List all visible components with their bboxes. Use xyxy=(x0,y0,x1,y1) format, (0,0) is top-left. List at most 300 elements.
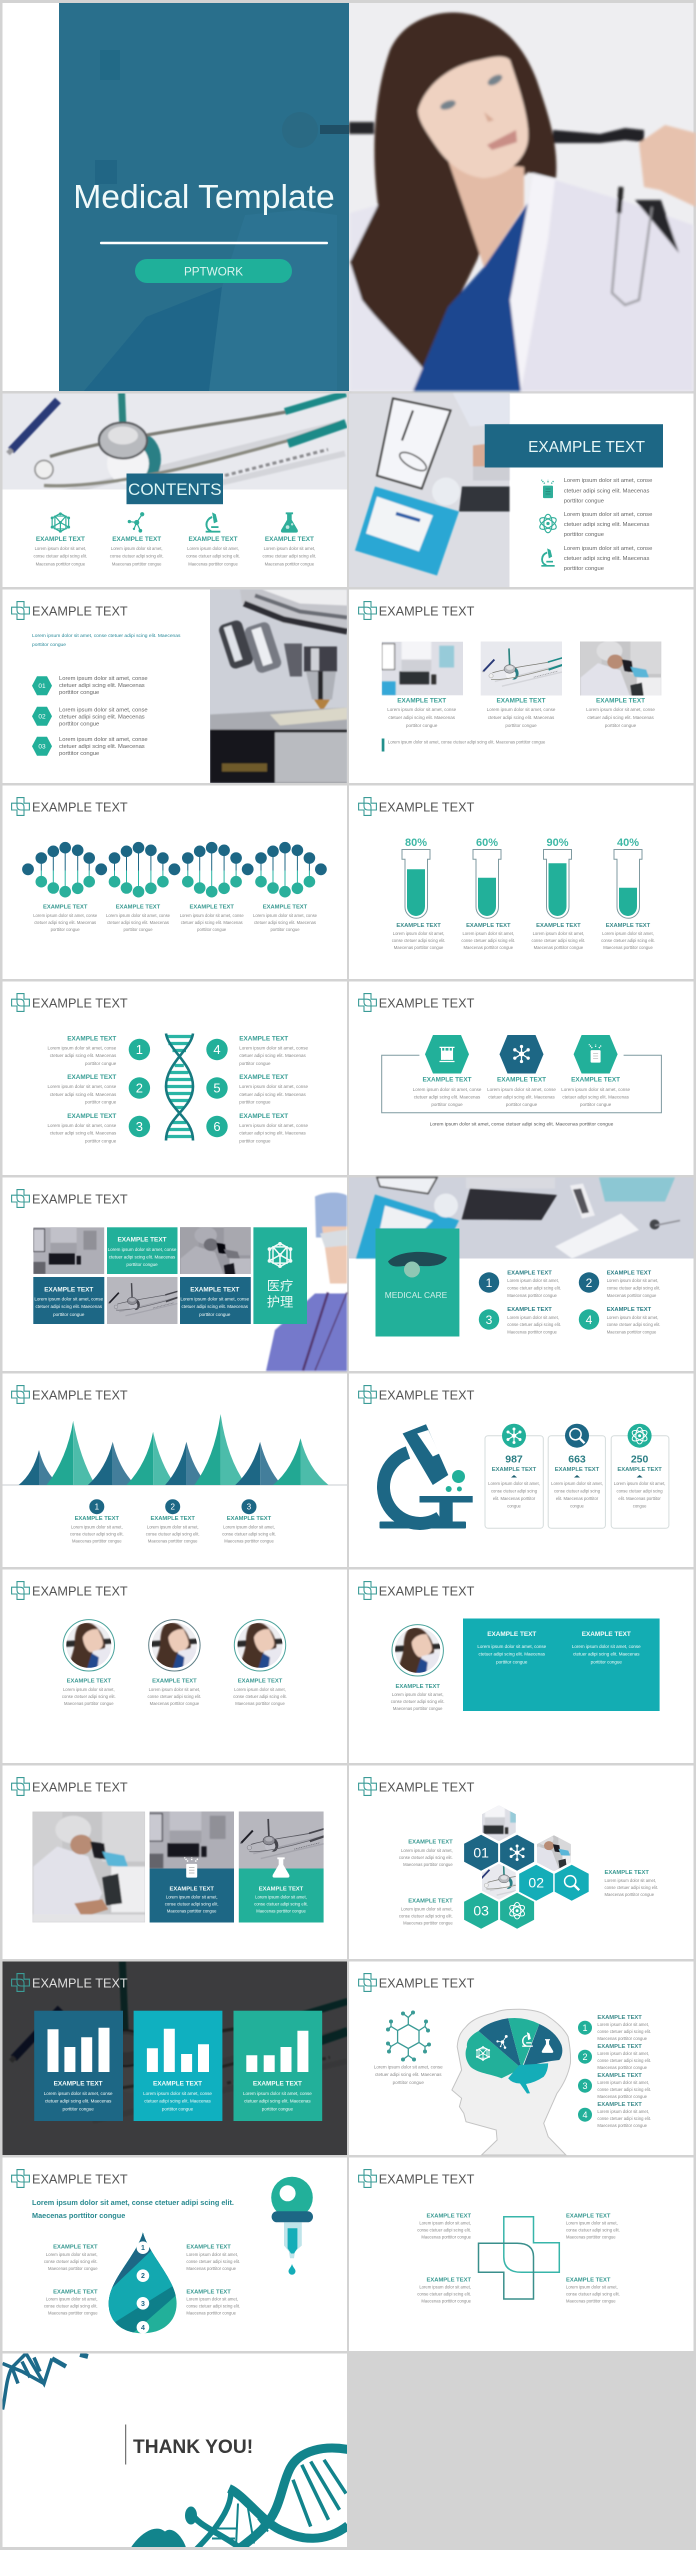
label bottom right: Lorem ipsum dolor sit amet, xyxy=(186,2296,238,2302)
point 2: EXAMPLE TEXT xyxy=(597,2044,642,2050)
text 3: ctetuer adipi scing elit. Maecenas xyxy=(562,1094,630,1099)
card chart 2: ctetuer adipi scing elit. Maecenas xyxy=(144,2099,212,2104)
hex icon atom xyxy=(500,1893,534,1929)
grid photo 1 xyxy=(33,1226,104,1274)
peak label 3: conse ctetuer adipi scing elit. xyxy=(222,1532,276,1536)
stat card 250: conse ctetuer adipi scing xyxy=(617,1488,663,1493)
item 2: porttitor congue xyxy=(85,1100,117,1105)
stat card 987: EXAMPLE TEXT xyxy=(492,1467,537,1473)
label top left: EXAMPLE TEXT xyxy=(427,2214,471,2220)
peak label 1: Lorem ipsum dolor sit amet, xyxy=(71,1524,123,1530)
item 01: porttitor congue xyxy=(59,690,99,696)
teal box: Lorem ipsum dolor sit amet, conse xyxy=(572,1644,641,1649)
label top left: EXAMPLE TEXT xyxy=(53,2245,98,2251)
peak label 2: conse ctetuer adipi scing elit. xyxy=(146,1532,200,1536)
header: EXAMPLE TEXT xyxy=(32,1977,128,1991)
label top left: EXAMPLE TEXT xyxy=(408,1839,453,1845)
card chart 2: porttitor congue xyxy=(162,2106,194,2111)
item 01: Lorem ipsum dolor sit amet, conse xyxy=(59,676,148,682)
tube label 3: Lorem ipsum dolor sit amet, xyxy=(533,931,584,936)
point 4: Lorem ipsum dolor sit amet, xyxy=(597,2109,649,2114)
list item 3: Lorem ipsum dolor sit amet, conse xyxy=(564,546,652,552)
heading box: contents xyxy=(126,474,223,504)
stat card 250: 250 xyxy=(631,1454,649,1466)
droplet chart xyxy=(108,2232,177,2334)
thank you text: THANK YOU! xyxy=(133,2437,253,2458)
label 1: Lorem ipsum dolor sit amet, conse xyxy=(33,913,98,918)
item 3: Lorem ipsum dolor sit amet, conse xyxy=(48,1123,117,1128)
item 3 xyxy=(48,1113,150,1143)
tube label 3 xyxy=(532,923,585,950)
label 3 xyxy=(180,904,244,932)
item 5: Lorem ipsum dolor sit amet, conse xyxy=(239,1084,308,1089)
item 03: 03 xyxy=(38,744,46,750)
portrait 3: Lorem ipsum dolor sit amet, xyxy=(234,1687,286,1692)
grid text 2 xyxy=(33,1277,104,1324)
point 2 xyxy=(578,2044,651,2070)
header xyxy=(359,1386,475,1403)
droplet chart: 1 xyxy=(141,2245,145,2252)
item 02: porttitor congue xyxy=(59,722,99,728)
droplet chart: 3 xyxy=(141,2301,145,2308)
intro text: porttitor congue xyxy=(32,642,66,648)
heading box: contents: CONTENTS xyxy=(128,480,222,499)
icon: hexagonal molecule xyxy=(386,2010,431,2062)
item 4 xyxy=(206,1036,308,1066)
label 2: porttitor congue xyxy=(123,927,153,932)
panel navy xyxy=(149,1809,235,1922)
item 3: ctetuer adipi scing elit. Maecenas xyxy=(50,1131,117,1136)
tube label 2 xyxy=(461,923,515,950)
list item 2 xyxy=(538,512,652,538)
column 2: Maecenas porttitor congue xyxy=(112,561,162,566)
label bottom right: Maecenas porttitor congue xyxy=(186,2310,237,2316)
label 4 xyxy=(253,904,318,932)
peak label 3: Lorem ipsum dolor sit amet, xyxy=(223,1524,275,1530)
label bottom left: Lorem ipsum dolor sit amet, xyxy=(401,1906,453,1912)
label bottom right: EXAMPLE TEXT xyxy=(566,2278,611,2284)
label top right: Maecenas porttitor congue xyxy=(186,2266,237,2271)
portrait 2: conse ctetuer adipi scing elit. xyxy=(148,1694,201,1699)
slide: three photos xyxy=(349,590,694,783)
portrait 1 xyxy=(61,1620,119,1706)
slide: test tubes xyxy=(349,786,694,979)
header xyxy=(12,602,128,619)
text 2: ctetuer adipi scing elit. Maecenas xyxy=(488,1094,556,1099)
portrait: Lorem ipsum dolor sit amet, xyxy=(392,1692,444,1697)
teal box: EXAMPLE TEXT xyxy=(582,1631,631,1638)
stat card 663: congue xyxy=(570,1504,585,1509)
peak label 3 xyxy=(222,1499,276,1544)
item 1: porttitor congue xyxy=(85,1061,117,1066)
caption: Lorem ipsum dolor sit amet, conse ctetuer adipi scing elit. Maecenas porttitor congue xyxy=(430,1121,614,1127)
grid text 1: ctetuer adipi scing elit. Maecenas xyxy=(109,1254,176,1260)
tall panel xyxy=(253,1227,307,1324)
photo: doctor with stethoscope xyxy=(349,3,696,391)
tube label 3: Maecenas porttitor congue xyxy=(534,945,584,950)
list item 1: Lorem ipsum dolor sit amet, conse xyxy=(564,478,652,484)
card chart 2: Lorem ipsum dolor sit amet, conse xyxy=(143,2091,212,2096)
label 3: EXAMPLE TEXT xyxy=(189,904,234,910)
point 4: EXAMPLE TEXT xyxy=(607,1307,652,1313)
peak label 1: conse ctetuer adipi scing elit. xyxy=(70,1532,124,1536)
label top right: EXAMPLE TEXT xyxy=(186,2245,231,2251)
caption 1: ctetuer adipi scing elit. Maecenas xyxy=(388,715,456,720)
hex photo top xyxy=(482,1806,516,1841)
stat card 663 xyxy=(548,1424,605,1528)
header: EXAMPLE TEXT xyxy=(32,605,128,619)
list item 3 xyxy=(541,546,652,572)
header: EXAMPLE TEXT xyxy=(379,1389,475,1403)
header xyxy=(359,798,475,815)
point 3 xyxy=(578,2073,651,2099)
portrait 3 xyxy=(232,1620,290,1706)
column 1: conse ctetuer adipi scing elit. xyxy=(34,554,87,559)
item 01: 01 xyxy=(38,683,46,690)
stat card 250: congue xyxy=(633,1504,647,1509)
subtitle pill: PPTWORK xyxy=(184,266,243,279)
test tube 40% xyxy=(614,837,642,918)
DNA top left xyxy=(2,2354,89,2410)
label bottom right xyxy=(566,2278,620,2304)
point 4: conse ctetuer adipi scing elit. xyxy=(597,2116,651,2121)
point 2 xyxy=(579,1270,660,1298)
column 2: EXAMPLE TEXT xyxy=(112,536,161,543)
stat card 987: elit. Maecenas porttitor xyxy=(493,1496,536,1501)
header: EXAMPLE TEXT xyxy=(379,997,475,1011)
column 2: Lorem ipsum dolor sit amet, xyxy=(111,546,163,551)
column 3: EXAMPLE TEXT xyxy=(188,536,238,543)
label top left: conse ctetuer adipi scing elit. xyxy=(44,2259,98,2264)
caption 3: ctetuer adipi scing elit. Maecenas xyxy=(587,715,655,720)
peak label 3: 3 xyxy=(247,1503,252,1512)
grid text 2: porttitor congue xyxy=(53,1312,85,1317)
text 1: Lorem ipsum dolor sit amet, conse xyxy=(413,1087,482,1092)
item 02: Lorem ipsum dolor sit amet, conse xyxy=(59,708,148,714)
label bottom left: Maecenas porttitor congue xyxy=(403,1920,453,1926)
label bottom right: Lorem ipsum dolor sit amet, xyxy=(566,2284,618,2290)
card chart 1 xyxy=(34,2011,123,2121)
peak label 2: EXAMPLE TEXT xyxy=(150,1516,195,1522)
caption 3: Lorem ipsum dolor sit amet, conse xyxy=(586,707,655,712)
stat card 987: congue xyxy=(507,1504,522,1509)
point 3 xyxy=(479,1307,561,1334)
tube label 1: EXAMPLE TEXT xyxy=(396,923,441,929)
point 3: Maecenas porttitor congue xyxy=(507,1329,558,1334)
item 6 xyxy=(206,1113,308,1143)
tube label 1: Lorem ipsum dolor sit amet, xyxy=(393,931,444,936)
label top right: conse ctetuer adipi scing elit. xyxy=(186,2259,240,2264)
caption 2: Lorem ipsum dolor sit amet, conse xyxy=(487,707,556,712)
slide: cover xyxy=(2,3,696,391)
header: EXAMPLE TEXT xyxy=(379,1781,475,1795)
column 1 xyxy=(34,512,87,566)
item 4: 4 xyxy=(213,1042,221,1057)
card chart 3: porttitor congue xyxy=(262,2106,294,2111)
title: Medical Template xyxy=(73,178,335,216)
item 2: EXAMPLE TEXT xyxy=(67,1074,116,1081)
teal box: Lorem ipsum dolor sit amet, conse xyxy=(477,1644,547,1649)
item 2: 2 xyxy=(136,1081,143,1096)
hex photo lower xyxy=(482,1864,516,1900)
item 1: 1 xyxy=(136,1042,143,1057)
stat card 250: EXAMPLE TEXT xyxy=(617,1467,662,1473)
point 4: 4 xyxy=(586,1313,593,1327)
label bottom right: EXAMPLE TEXT xyxy=(186,2289,231,2295)
stat card 987 xyxy=(485,1424,543,1528)
test tube 40%: 40% xyxy=(617,837,639,849)
stat card 987: Lorem ipsum dolor sit amet, xyxy=(488,1481,540,1486)
tube label 1: Maecenas porttitor congue xyxy=(394,945,444,950)
test tube 60%: 60% xyxy=(476,837,498,849)
item 2: Lorem ipsum dolor sit amet, conse xyxy=(48,1084,117,1089)
stat card 250: elit. Maecenas porttitor xyxy=(618,1496,661,1501)
test tube 90%: 90% xyxy=(546,837,569,849)
portrait 1: conse ctetuer adipi scing elit. xyxy=(62,1694,116,1699)
point 2: Maecenas porttitor congue xyxy=(607,1293,657,1298)
molecule text: porttitor congue xyxy=(393,2080,424,2085)
head silhouette xyxy=(452,2009,571,2155)
photo: scientist xyxy=(32,1812,145,1922)
peak label 1: Maecenas porttitor congue xyxy=(72,1538,122,1544)
portrait 2: Lorem ipsum dolor sit amet, xyxy=(149,1687,200,1692)
icon: dropper xyxy=(271,2177,313,2275)
portrait 3: Maecenas porttitor congue xyxy=(235,1701,285,1706)
label top left: conse ctetuer adipi scing elit. xyxy=(417,2227,471,2232)
panel navy: conse ctetuer adipi scing elit. xyxy=(165,1902,219,1906)
hexagon 2 xyxy=(500,1035,544,1074)
header xyxy=(12,1582,128,1599)
point 1 xyxy=(479,1270,561,1298)
vertical rule xyxy=(125,2424,126,2464)
text 3: EXAMPLE TEXT xyxy=(571,1076,620,1084)
label 4: ctetuer adipi scing elit. Maecenas xyxy=(254,920,316,925)
peak label 2: 2 xyxy=(170,1503,175,1512)
panel teal: conse ctetuer adipi scing elit. xyxy=(254,1902,308,1906)
hex 01: 01 xyxy=(473,1845,489,1861)
slide: contents xyxy=(0,274,410,694)
header: EXAMPLE TEXT xyxy=(32,997,128,1011)
label 3: ctetuer adipi scing elit. Maecenas xyxy=(181,920,243,925)
card chart 3: ctetuer adipi scing elit. Maecenas xyxy=(244,2099,311,2104)
list item 1: porttitor congue xyxy=(564,499,604,505)
point 1: 1 xyxy=(582,2023,588,2033)
tube label 1: conse ctetuer adipi scing elit. xyxy=(392,938,445,943)
teal box: ctetuer adipi scing elit. Maecenas xyxy=(573,1652,640,1657)
photo: stethoscope xyxy=(2,394,347,490)
hex 03: 03 xyxy=(473,1903,489,1919)
point 1: conse ctetuer adipi scing elit. xyxy=(507,1286,561,1290)
item 6: porttitor congue xyxy=(239,1138,271,1143)
column 4: EXAMPLE TEXT xyxy=(265,536,314,543)
intro text: Lorem ipsum dolor sit amet, conse ctetuer adipi scing elit. Maecenas xyxy=(32,633,181,639)
label 3: Lorem ipsum dolor sit amet, conse xyxy=(180,913,244,918)
label 2: ctetuer adipi scing elit. Maecenas xyxy=(107,920,169,925)
banner: EXAMPLE TEXT xyxy=(528,439,645,456)
tube label 4 xyxy=(601,923,655,950)
column 3: Maecenas porttitor congue xyxy=(188,561,238,566)
item 6: 6 xyxy=(213,1119,221,1134)
grid photo 3 xyxy=(95,1267,191,1353)
point 3: Lorem ipsum dolor sit amet, xyxy=(597,2080,649,2085)
card chart 2 xyxy=(134,2011,222,2121)
text 1 xyxy=(413,1076,482,1107)
text 2 xyxy=(487,1076,556,1107)
label right xyxy=(604,1870,658,1897)
panel teal: EXAMPLE TEXT xyxy=(259,1886,304,1892)
portrait: conse ctetuer adipi scing elit. xyxy=(391,1699,445,1704)
panel navy: Maecenas porttitor congue xyxy=(167,1908,217,1914)
peak label 2: Maecenas porttitor congue xyxy=(148,1538,198,1544)
point 3: EXAMPLE TEXT xyxy=(597,2073,642,2079)
caption 3: EXAMPLE TEXT xyxy=(596,698,645,704)
point 3: Maecenas porttitor congue xyxy=(597,2094,648,2099)
label top left: Maecenas porttitor congue xyxy=(403,1862,453,1867)
stat card 663: EXAMPLE TEXT xyxy=(555,1467,600,1473)
droplet chart: 2 xyxy=(141,2273,145,2280)
label top left: Maecenas porttitor congue xyxy=(421,2234,472,2239)
portrait 2: Maecenas porttitor congue xyxy=(150,1701,200,1706)
DNA bottom right xyxy=(131,2444,347,2547)
teal box: ctetuer adipi scing elit. Maecenas xyxy=(479,1652,546,1657)
peak label 3: EXAMPLE TEXT xyxy=(227,1516,272,1522)
text 2: porttitor congue xyxy=(506,1102,538,1107)
text 3: Lorem ipsum dolor sit amet, conse xyxy=(561,1087,630,1092)
point 4 xyxy=(578,2102,651,2128)
caption 1: EXAMPLE TEXT xyxy=(397,698,446,704)
card chart 3: Lorem ipsum dolor sit amet, conse xyxy=(243,2091,312,2096)
point 3: 3 xyxy=(486,1313,493,1327)
header xyxy=(12,1778,128,1795)
label top right: Lorem ipsum dolor sit amet, xyxy=(566,2220,618,2225)
caption 1 xyxy=(387,698,457,728)
column 3: Lorem ipsum dolor sit amet, xyxy=(187,546,239,551)
list item 2: porttitor congue xyxy=(564,532,604,538)
card chart 2: EXAMPLE TEXT xyxy=(153,2081,202,2088)
header xyxy=(12,798,128,815)
stat card 663: conse ctetuer adipi scing xyxy=(554,1488,601,1493)
point 1: EXAMPLE TEXT xyxy=(597,2015,642,2021)
item 02: 02 xyxy=(38,714,46,720)
test tube 90% xyxy=(544,837,572,918)
tube label 4: Lorem ipsum dolor sit amet, xyxy=(602,931,654,936)
header xyxy=(12,1974,128,1991)
card chart 1: porttitor congue xyxy=(62,2106,94,2111)
point 1: EXAMPLE TEXT xyxy=(507,1270,552,1276)
photo 2 xyxy=(480,642,562,696)
header: EXAMPLE TEXT xyxy=(32,801,128,815)
caption 1: porttitor congue xyxy=(406,723,438,728)
item 6: ctetuer adipi scing elit. Maecenas xyxy=(239,1131,306,1136)
slide: photo grid with nurse xyxy=(2,1178,347,1371)
label 2 xyxy=(106,904,171,932)
photo: desk banner xyxy=(349,1178,694,1258)
header xyxy=(359,994,475,1011)
point 4: Maecenas porttitor congue xyxy=(597,2123,648,2128)
slide: DNA chain xyxy=(2,786,347,979)
slide: thank you xyxy=(2,2354,348,2550)
label 2: EXAMPLE TEXT xyxy=(116,904,161,910)
column 3 xyxy=(186,512,240,566)
tube label 1 xyxy=(392,923,445,950)
header: EXAMPLE TEXT xyxy=(32,1781,128,1795)
teal box xyxy=(463,1618,660,1711)
label right: conse ctetuer adipi scing elit. xyxy=(604,1885,658,1890)
subtitle pill xyxy=(135,259,292,283)
slide: photo panels xyxy=(2,1766,347,1959)
slide: cross xyxy=(349,2158,694,2351)
column 4: Lorem ipsum dolor sit amet, xyxy=(264,546,315,551)
grid text 2: Lorem ipsum dolor sit amet, conse xyxy=(34,1296,104,1302)
droplet chart: 4 xyxy=(141,2325,145,2332)
peak label 3: Maecenas porttitor congue xyxy=(224,1538,274,1544)
label top right: Lorem ipsum dolor sit amet, xyxy=(186,2252,238,2257)
hexagon 3 xyxy=(574,1035,618,1074)
grid text 3: porttitor congue xyxy=(199,1312,231,1317)
label bottom left: EXAMPLE TEXT xyxy=(53,2289,98,2295)
point 2: Lorem ipsum dolor sit amet, xyxy=(597,2051,649,2056)
label bottom left xyxy=(417,2278,472,2304)
list item 1 xyxy=(541,478,652,505)
label bottom left xyxy=(399,1898,453,1926)
label 4: EXAMPLE TEXT xyxy=(263,904,308,910)
header xyxy=(359,2170,475,2187)
label top left: Lorem ipsum dolor sit amet, xyxy=(46,2252,98,2257)
label top left xyxy=(44,2245,98,2271)
column 4 xyxy=(263,512,316,566)
text 3: porttitor congue xyxy=(580,1102,612,1107)
peak label 1: 1 xyxy=(95,1503,100,1512)
label top right: Maecenas porttitor congue xyxy=(566,2234,616,2239)
portrait 3: conse ctetuer adipi scing elit. xyxy=(233,1694,287,1699)
item 3: EXAMPLE TEXT xyxy=(67,1113,116,1120)
slide: three hexagons xyxy=(349,982,694,1175)
label top left: Lorem ipsum dolor sit amet, xyxy=(419,2220,471,2225)
item 03 xyxy=(32,737,148,757)
point 2: conse ctetuer adipi scing elit. xyxy=(607,1286,660,1290)
grid text 1: porttitor congue xyxy=(126,1262,158,1267)
panel teal: Maecenas porttitor congue xyxy=(256,1908,306,1914)
item 6: EXAMPLE TEXT xyxy=(239,1113,288,1120)
tube label 4: Maecenas porttitor congue xyxy=(603,945,653,950)
caption 1: Lorem ipsum dolor sit amet, conse xyxy=(387,707,457,712)
point 3: EXAMPLE TEXT xyxy=(507,1307,552,1313)
point 3: conse ctetuer adipi scing elit. xyxy=(507,1322,561,1327)
bracket frame xyxy=(382,1055,661,1113)
slide: dark bar charts xyxy=(0,1882,412,2301)
test tube 80%: 80% xyxy=(405,837,427,849)
point 4: EXAMPLE TEXT xyxy=(597,2102,642,2108)
slide: mountain peaks xyxy=(2,1374,347,1567)
bold intro text: Lorem ipsum dolor sit amet, conse ctetuer adipi scing elit. xyxy=(32,2198,234,2207)
label bottom left xyxy=(44,2289,98,2316)
label bottom left: conse ctetuer adipi scing elit. xyxy=(417,2292,471,2296)
card chart 1: ctetuer adipi scing elit. Maecenas xyxy=(45,2099,112,2104)
item 2: ctetuer adipi scing elit. Maecenas xyxy=(50,1092,117,1097)
stat card 663: 663 xyxy=(568,1454,586,1466)
tube label 2: EXAMPLE TEXT xyxy=(466,923,511,929)
list item 1: ctetuer adipi scing elit. Maecenas xyxy=(564,488,650,494)
label top right: EXAMPLE TEXT xyxy=(566,2214,611,2220)
item 03: ctetuer adipi scing elit. Maecenas xyxy=(59,744,145,750)
caption 2: ctetuer adipi scing elit. Maecenas xyxy=(488,715,555,720)
list item 2: ctetuer adipi scing elit. Maecenas xyxy=(564,522,650,528)
header: EXAMPLE TEXT xyxy=(379,605,475,619)
label bottom left: EXAMPLE TEXT xyxy=(408,1898,453,1904)
list item 3: porttitor congue xyxy=(564,566,604,572)
label 1 xyxy=(33,904,98,932)
grid text 2: ctetuer adipi scing elit. Maecenas xyxy=(36,1304,103,1309)
